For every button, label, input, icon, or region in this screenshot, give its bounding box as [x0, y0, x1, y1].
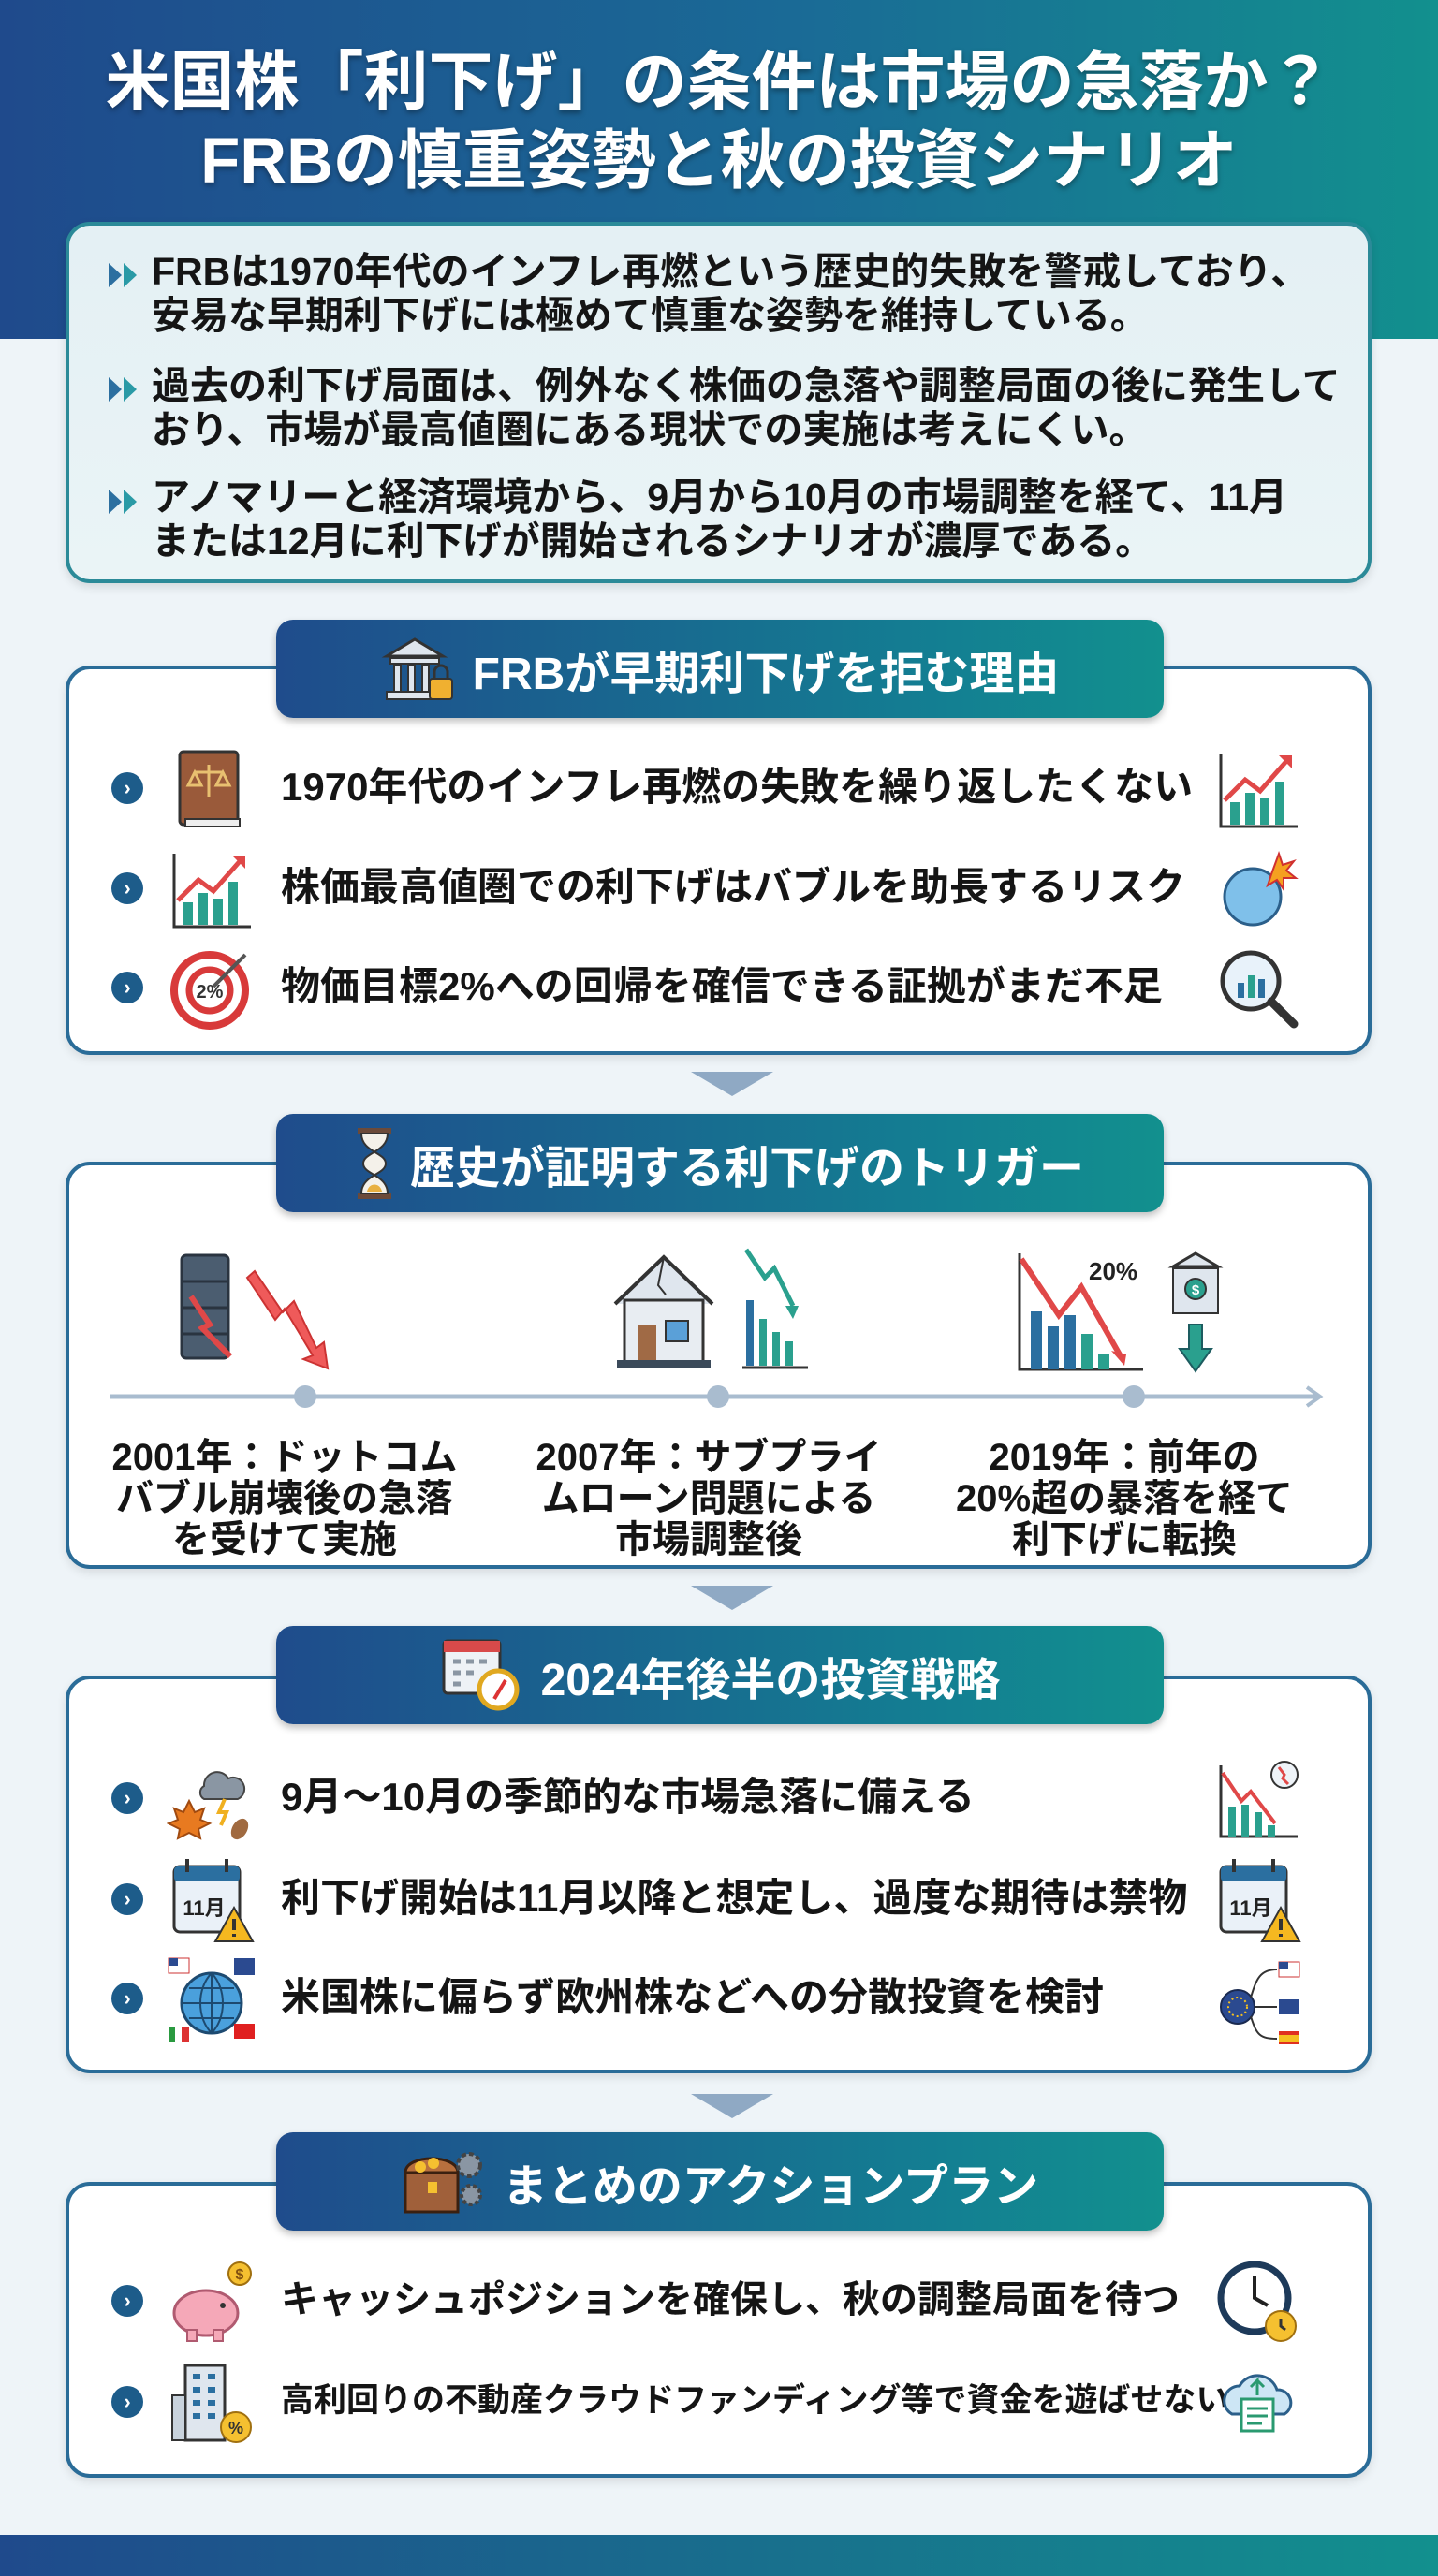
icon: 20% crash and bank [1019, 1251, 1223, 1373]
row 1: 9月～10月の季節的な市場急落に備える [281, 1775, 975, 1819]
summary box: FRBは1970年代のインフレ再燃という歴史的失敗を警戒しており、 [152, 250, 1309, 293]
icon: server crash [180, 1254, 330, 1370]
icon: storm and leaves [167, 1771, 249, 1840]
icon: calendar 11月 warning: 11月 [1229, 1896, 1272, 1920]
icon: globe with flags [169, 1958, 255, 2042]
row 1: › [124, 1786, 131, 1809]
icon: piggy bank [172, 2261, 252, 2342]
event 2001 [112, 1254, 457, 1560]
row 1 [111, 2261, 1297, 2342]
icon: 20% crash and bank: $ [1192, 1282, 1200, 1298]
row 1: › [124, 2289, 131, 2312]
icon: magnifier chart [1221, 951, 1298, 1028]
icon: calendar 11月 warning: 11月 [183, 1896, 226, 1920]
panel 4 box [66, 2182, 1372, 2478]
summary box: 安易な早期利下げには極めて慎重な姿勢を維持している。 [152, 294, 1149, 337]
icon: law book [178, 751, 241, 827]
event 2001: を受けて実施 [172, 1519, 397, 1560]
event 2007: ムローン問題による [542, 1478, 875, 1519]
event 2019: 利下げに転換 [1012, 1519, 1237, 1560]
row 3: 米国株に偏らず欧州株などへの分散投資を検討 [281, 1975, 1104, 2019]
event 2007: 2007年：サブプライ [536, 1437, 881, 1478]
row 1: キャッシュポジションを確保し、秋の調整局面を待つ [281, 2279, 1180, 2320]
title: 米国株「利下げ」の条件は市場の急落か？ [105, 46, 1333, 118]
event 2001: バブル崩壊後の急落 [116, 1478, 453, 1519]
icon: EU distribution [1220, 1962, 1299, 2044]
summary box: または12月に利下げが開始されるシナリオが濃厚である。 [152, 520, 1153, 563]
panel 3 box [66, 1676, 1372, 2073]
summary bullet 3 [109, 476, 1287, 563]
panel 4 heading [276, 2132, 1164, 2231]
event 2019: 20%超の暴落を経て [956, 1478, 1293, 1519]
event 2007 [536, 1249, 881, 1560]
summary box: アノマリーと経済環境から、9月から10月の市場調整を経て、11月 [152, 476, 1287, 519]
row 2 [111, 2364, 1292, 2443]
summary box [66, 222, 1372, 583]
row 3: › [124, 975, 131, 999]
panel 3 heading [276, 1626, 1164, 1724]
row 1: › [124, 776, 131, 799]
icon: rising chart [1219, 754, 1298, 827]
panel 3 heading: 2024年後半の投資戦略 [541, 1655, 1000, 1705]
icon: building percent [171, 2364, 252, 2443]
footer band [0, 2535, 1438, 2576]
row 2 [111, 1859, 1301, 1942]
title [105, 46, 1333, 197]
row 3: 物価目標2%への回帰を確信できる証拠がまだ不足 [281, 964, 1163, 1008]
row 2: › [124, 876, 131, 900]
row 2 [111, 851, 1299, 929]
panel 2 box [66, 1162, 1372, 1569]
panel 2 heading [276, 1114, 1164, 1212]
row 3: › [124, 1986, 131, 2010]
row 2: 高利回りの不動産クラウドファンディング等で資金を遊ばせない [281, 2382, 1229, 2419]
icon: rising chart [172, 854, 251, 929]
icon: calendar compass [442, 1640, 519, 1711]
row 2: › [124, 2390, 131, 2413]
icon: treasure chest gears [404, 2152, 482, 2213]
panel 2 heading: 歴史が証明する利下げのトリガー [410, 1144, 1084, 1193]
icon: calendar 11月 warning [1219, 1859, 1301, 1942]
icon: building percent: % [228, 2419, 243, 2437]
event 2001: 2001年：ドットコム [112, 1437, 457, 1478]
icon: hourglass [358, 1128, 391, 1199]
panel 1 box [66, 666, 1372, 1055]
icon: cloud document [1223, 2374, 1292, 2432]
arrow [691, 1586, 773, 1610]
summary bullet 1 [109, 250, 1309, 337]
summary bullet 2 [109, 364, 1341, 451]
row 2: 利下げ開始は11月以降と想定し、過度な期待は禁物 [281, 1876, 1187, 1920]
timeline [110, 1385, 1324, 1408]
icon: broken house and falling bars [614, 1249, 808, 1368]
event 2019: 2019年：前年の [989, 1437, 1259, 1478]
row 1 [111, 751, 1298, 827]
row 1: 1970年代のインフレ再燃の失敗を繰り返したくない [281, 765, 1193, 809]
summary box: おり、市場が最高値圏にある現状での実施は考えにくい。 [152, 408, 1148, 451]
event 2019 [956, 1251, 1293, 1560]
icon: target [170, 951, 249, 1030]
row 2: 株価最高値圏での利下げはバブルを助長するリスク [281, 865, 1185, 909]
arrow [691, 2094, 773, 2118]
title: FRBの慎重姿勢と秋の投資シナリオ [200, 124, 1238, 197]
icon: bank with lock [382, 637, 453, 700]
header band [0, 0, 1438, 339]
row 2: › [124, 1887, 131, 1910]
panel 4 heading: まとめのアクションプラン [503, 2162, 1038, 2211]
summary box: 過去の利下げ局面は、例外なく株価の急落や調整局面の後に発生して [152, 364, 1341, 407]
arrow [691, 1072, 773, 1096]
row 1 [111, 1761, 1299, 1840]
icon: 20% crash and bank: 20% [1089, 1257, 1137, 1285]
event 2007: 市場調整後 [615, 1519, 802, 1560]
panel 1 heading [276, 620, 1164, 718]
icon: calendar 11月 warning [172, 1859, 255, 1942]
row 3 [111, 1958, 1299, 2044]
panel 1 heading: FRBが早期利下げを拒む理由 [473, 650, 1059, 698]
icon: piggy bank: $ [236, 2267, 244, 2283]
icon: target: 2% [197, 982, 224, 1003]
row 3 [111, 951, 1298, 1030]
icon: bursting bubble [1223, 851, 1299, 927]
icon: clock [1217, 2261, 1297, 2342]
icon: falling chart [1219, 1761, 1299, 1838]
